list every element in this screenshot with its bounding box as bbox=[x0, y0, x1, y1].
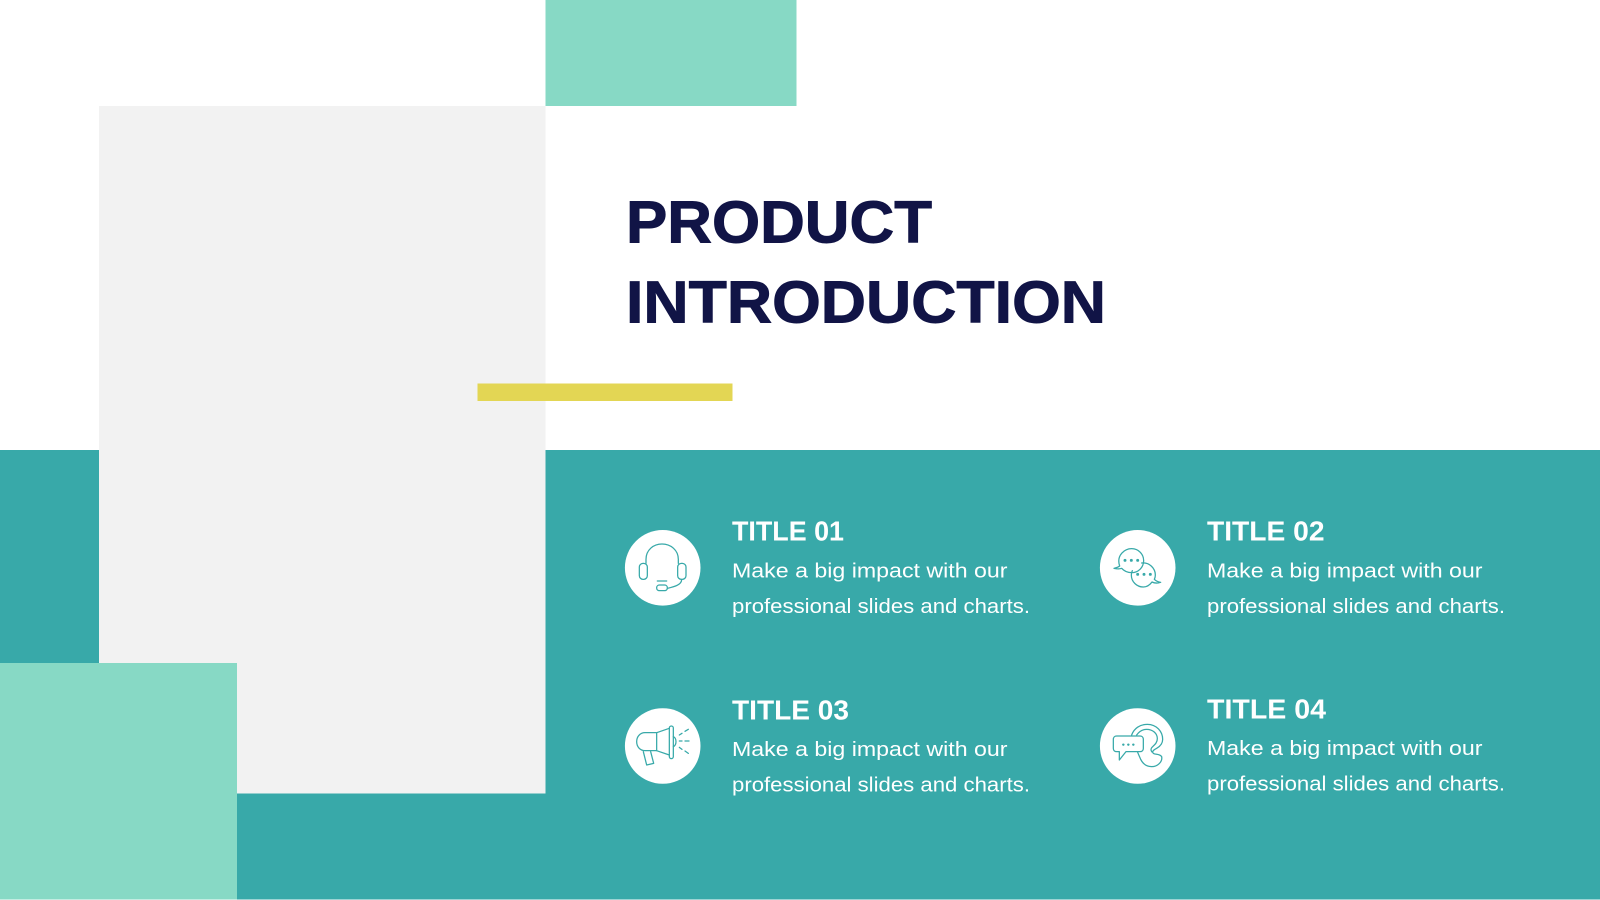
item: title 02 bbox=[1100, 516, 1505, 618]
item: title 03 bbox=[625, 694, 1030, 797]
icon: ear and speech bubble bbox=[1100, 708, 1175, 784]
icon: headset bbox=[625, 530, 700, 606]
item: title 04 bbox=[1100, 693, 1505, 796]
heading: title 04: TITLE 04 bbox=[1207, 693, 1327, 724]
body text: title 02: professional slides and charts. bbox=[1207, 595, 1505, 618]
item: title 01 bbox=[625, 516, 1030, 618]
body text: title 04: professional slides and charts. bbox=[1207, 773, 1505, 796]
heading: title 02: TITLE 02 bbox=[1207, 516, 1324, 547]
title bbox=[626, 190, 1106, 336]
body text: title 04 bbox=[1207, 737, 1505, 796]
panel: gray image placeholder bbox=[99, 106, 546, 794]
heading: title 01: TITLE 01 bbox=[732, 516, 844, 547]
icon: chat bubbles bbox=[1100, 530, 1175, 606]
title: PRODUCT bbox=[626, 190, 932, 256]
accent bar: yellow bbox=[478, 384, 732, 401]
body text: title 01: professional slides and charts. bbox=[732, 595, 1030, 618]
title: INTRODUCTION bbox=[626, 270, 1106, 336]
body text: title 04: Make a big impact with our bbox=[1207, 737, 1483, 760]
body text: title 03: Make a big impact with our bbox=[732, 738, 1008, 761]
heading: title 03: TITLE 03 bbox=[732, 694, 849, 725]
body text: title 02: Make a big impact with our bbox=[1207, 559, 1483, 582]
body text: title 01 bbox=[732, 559, 1030, 618]
body text: title 03: professional slides and charts. bbox=[732, 774, 1030, 797]
panel: teal lower band bbox=[0, 450, 1600, 900]
body text: title 01: Make a big impact with our bbox=[732, 559, 1008, 582]
icon: megaphone bbox=[625, 708, 700, 784]
decorative block: top mint rectangle bbox=[546, 0, 796, 106]
body text: title 03 bbox=[732, 738, 1030, 797]
body text: title 02 bbox=[1207, 559, 1505, 618]
decorative block: bottom-left mint rectangle bbox=[0, 663, 237, 900]
